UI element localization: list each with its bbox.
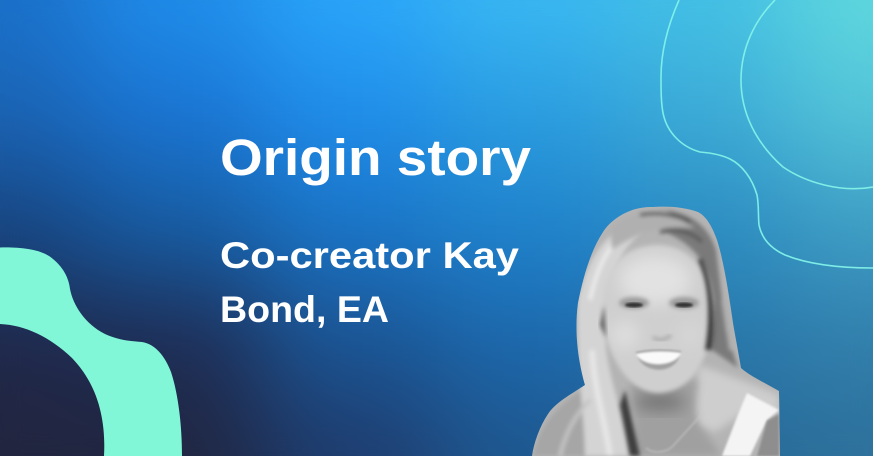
- face: [603, 245, 712, 393]
- decorative outline curves top-right: [661, 0, 873, 268]
- white top and shoulder: [722, 393, 779, 456]
- hair shadow by the face: [698, 258, 714, 350]
- eyes: [625, 302, 693, 308]
- hair top and right: [610, 209, 738, 368]
- smile: [636, 351, 681, 370]
- subtitle: Co-creator Kay Bond, EA: Bond, EA: [220, 289, 389, 330]
- hair base: [530, 205, 780, 456]
- dark hair shadow beside the neck: [620, 390, 640, 456]
- title: Origin story: Origin story: [220, 129, 532, 186]
- neck and chest: [630, 380, 722, 456]
- subtitle: Co-creator Kay Bond, EA: [220, 235, 519, 330]
- portrait photo: woman, black and white: [530, 205, 780, 456]
- decorative mint shape bottom-left: [0, 247, 182, 456]
- necklace: [646, 420, 697, 453]
- lower right hair: [695, 365, 779, 432]
- eye sockets: [619, 297, 699, 309]
- nose: [653, 335, 671, 340]
- subtitle: Co-creator Kay Bond, EA: Co-creator Kay: [220, 235, 519, 276]
